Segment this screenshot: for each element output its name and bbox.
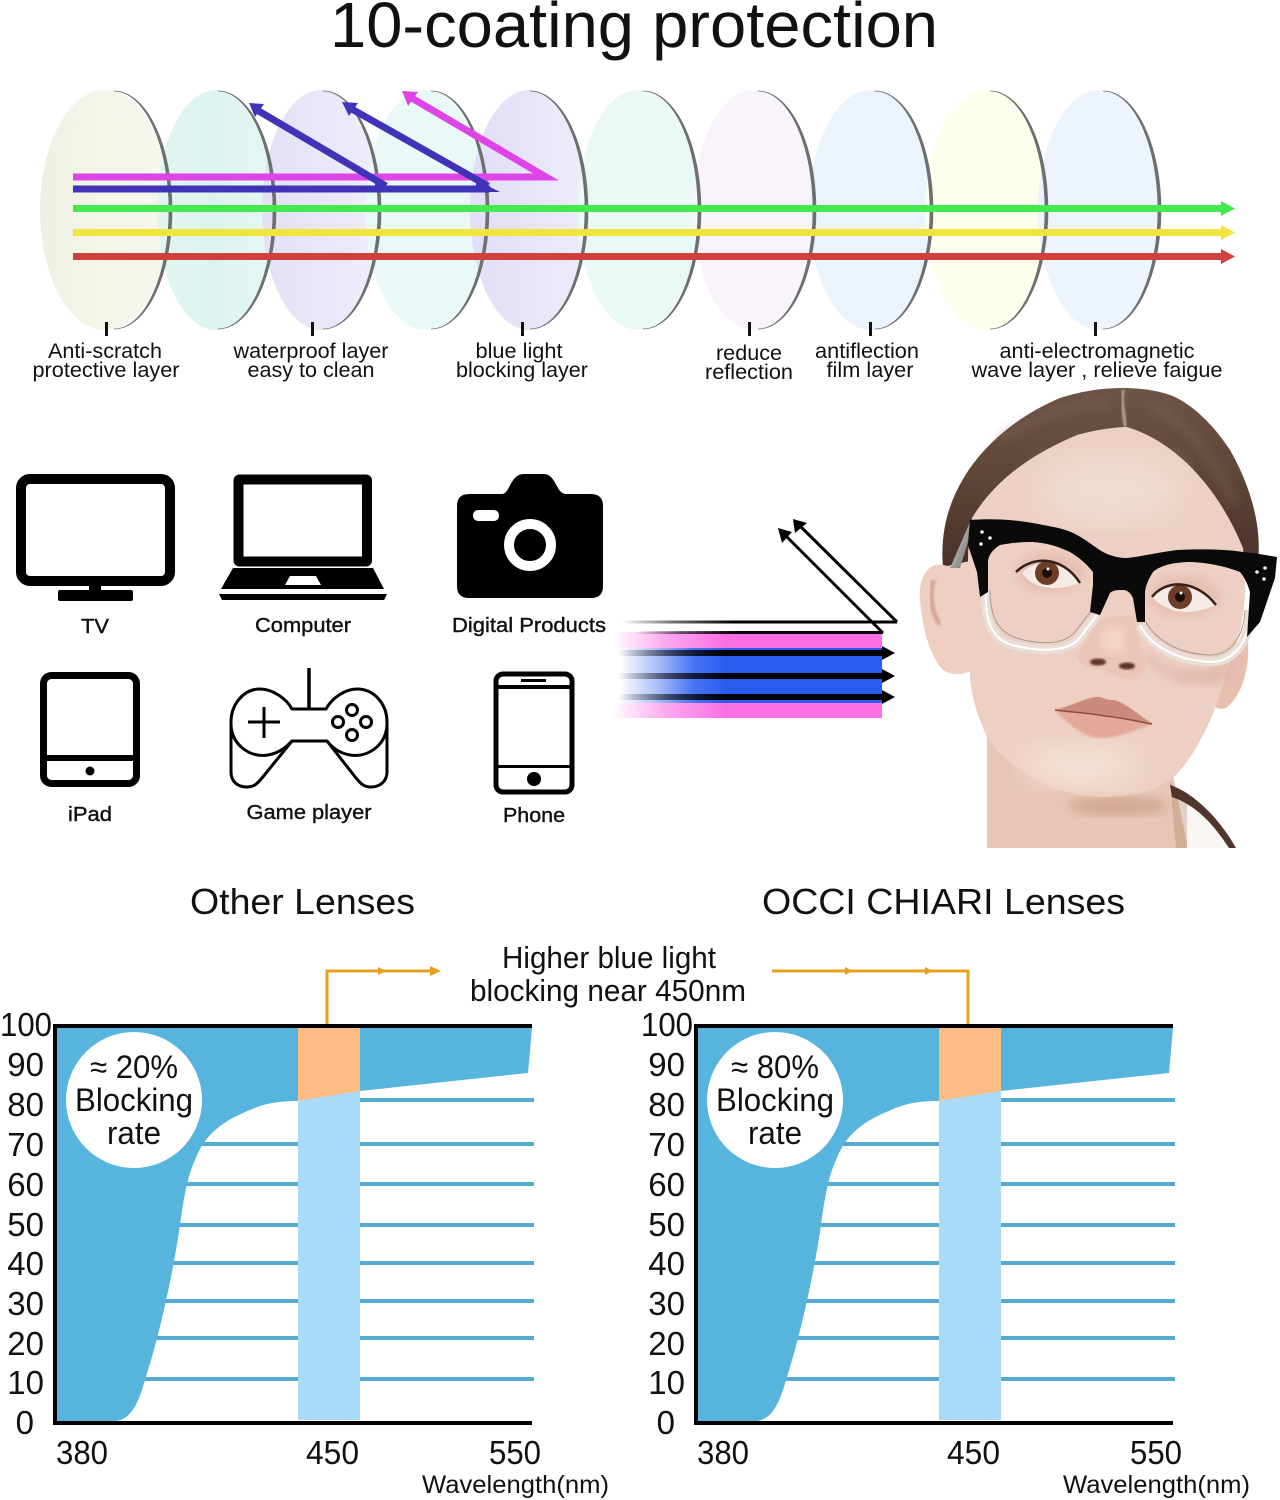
y axis labels: 30 (648, 1285, 685, 1322)
layer labels: anti-electromagnetic (1000, 340, 1194, 363)
blocking rate badge: rate (748, 1115, 802, 1151)
blocking rate badge: ≈ 80% (731, 1049, 819, 1085)
y axis labels: 60 (648, 1166, 685, 1203)
reflected magenta ray (73, 91, 558, 180)
layer labels: blue light (476, 340, 563, 363)
incoming light bands (612, 632, 882, 718)
icon: iPad: iPad (68, 803, 112, 826)
y axis labels: 50 (648, 1206, 685, 1243)
axes (53, 1026, 532, 1423)
black upper frames (968, 519, 1277, 637)
blocked area (57, 1028, 532, 1421)
blocking rate badge: rate (107, 1115, 161, 1151)
chart: OCCI CHIARI lenses (641, 1006, 1250, 1499)
y axis labels: 90 (7, 1046, 44, 1083)
heading: Other Lenses: Other Lenses (190, 881, 415, 922)
layer labels: film layer (826, 359, 914, 382)
eyes (1016, 552, 1220, 616)
lens discs (40, 90, 1160, 330)
x axis labels (56, 1434, 609, 1499)
450nm band (939, 1028, 1001, 1420)
x axis labels: 450 (306, 1434, 359, 1471)
lips (1055, 697, 1152, 738)
y axis labels: 40 (648, 1245, 685, 1282)
green ray (73, 201, 1235, 216)
y axis labels: 80 (648, 1086, 685, 1123)
y axis labels: 0 (16, 1404, 34, 1441)
y axis labels: 20 (648, 1325, 685, 1362)
blocking rate badge: Blocking (75, 1082, 193, 1118)
x axis labels: 380 (697, 1434, 749, 1471)
y axis labels: 50 (7, 1206, 44, 1243)
icon: TV (21, 479, 170, 638)
icon: phone (496, 674, 572, 827)
layer labels: Anti-scratch (48, 340, 162, 363)
blocking rate badge: Blocking (716, 1082, 834, 1118)
y axis labels: 40 (7, 1245, 44, 1282)
icon: computer (219, 480, 387, 637)
y axis labels: 0 (657, 1404, 675, 1441)
chart: other lenses (0, 1006, 609, 1499)
transmitted arrows (612, 646, 895, 704)
layer labels: protective layer (32, 359, 180, 382)
cheek shadow (1145, 650, 1235, 685)
x axis labels: Wavelength(nm) (1063, 1471, 1250, 1499)
layer labels: reduce (716, 342, 782, 365)
x axis labels: Wavelength(nm) (422, 1471, 609, 1499)
x axis labels: 550 (1130, 1434, 1182, 1471)
450nm band (298, 1028, 360, 1420)
forehead and chin highlights (1025, 455, 1180, 787)
stop band grid lines (781, 1098, 1175, 1381)
y axis labels: 100 (641, 1006, 693, 1043)
icon: iPad (44, 676, 136, 826)
icon: camera (452, 474, 606, 637)
y axis labels: 90 (648, 1046, 685, 1083)
y axis labels (0, 1006, 52, 1441)
layer labels: easy to clean (248, 359, 374, 382)
layer labels: reflection (705, 361, 793, 384)
layer labels: waterproof layer (232, 340, 388, 363)
y axis labels: 70 (7, 1126, 44, 1163)
light filtering diagram (612, 519, 897, 718)
layer labels: antiflection (815, 340, 919, 363)
icon: TV: TV (81, 615, 109, 638)
x axis labels: 550 (489, 1434, 541, 1471)
x axis labels: 450 (947, 1434, 1000, 1471)
y axis labels: 20 (7, 1325, 44, 1362)
y axis labels (641, 1006, 693, 1441)
reflected blue rays (73, 102, 500, 192)
icon: game player (231, 668, 387, 824)
arrow: left connector (327, 966, 441, 1024)
label ticks (105, 322, 1097, 336)
layer labels (32, 340, 1222, 384)
ears (920, 560, 1248, 709)
reflected white-light arrows (616, 519, 897, 634)
portrait of woman wearing glasses (920, 388, 1277, 848)
layer labels: wave layer , relieve faigue (970, 359, 1222, 382)
clear lower frames (986, 590, 1250, 662)
stop band grid lines (140, 1098, 534, 1381)
callout: higher blue light (470, 940, 746, 1008)
axes (694, 1026, 1173, 1423)
lens stack diagram (32, 90, 1235, 384)
icon: computer: Computer (255, 614, 351, 637)
yellow ray (73, 225, 1235, 240)
icon: camera: Digital Products (452, 614, 606, 637)
y axis labels: 10 (7, 1364, 44, 1401)
y axis labels: 60 (7, 1166, 44, 1203)
nose (1077, 615, 1145, 679)
blocked area (698, 1028, 1173, 1421)
blocking rate badge (66, 1032, 202, 1168)
arrow: right connector (772, 967, 968, 1024)
blocking rate badge (707, 1032, 843, 1168)
y axis labels: 10 (648, 1364, 685, 1401)
layer labels: blocking layer (456, 359, 588, 382)
callout: higher blue light: blocking near 450nm (470, 973, 746, 1008)
hair (942, 388, 1259, 570)
y axis labels: 100 (0, 1006, 52, 1043)
y axis labels: 30 (7, 1285, 44, 1322)
x axis labels (697, 1434, 1250, 1499)
frame rivets (979, 530, 1267, 581)
callout: higher blue light: Higher blue light (502, 940, 716, 975)
y axis labels: 70 (648, 1126, 685, 1163)
blocking rate badge: ≈ 20% (90, 1049, 178, 1085)
face (968, 427, 1245, 797)
red ray (73, 249, 1235, 264)
neck and shoulder (987, 720, 1236, 848)
lens edges (114, 91, 1161, 329)
frame temple (950, 522, 970, 568)
y axis labels: 80 (7, 1086, 44, 1123)
heading: OCCI CHIARI Lenses: OCCI CHIARI Lenses (762, 881, 1125, 922)
icon: game player: Game player (246, 801, 372, 824)
icon: phone: Phone (503, 804, 565, 827)
x axis labels: 380 (56, 1434, 108, 1471)
